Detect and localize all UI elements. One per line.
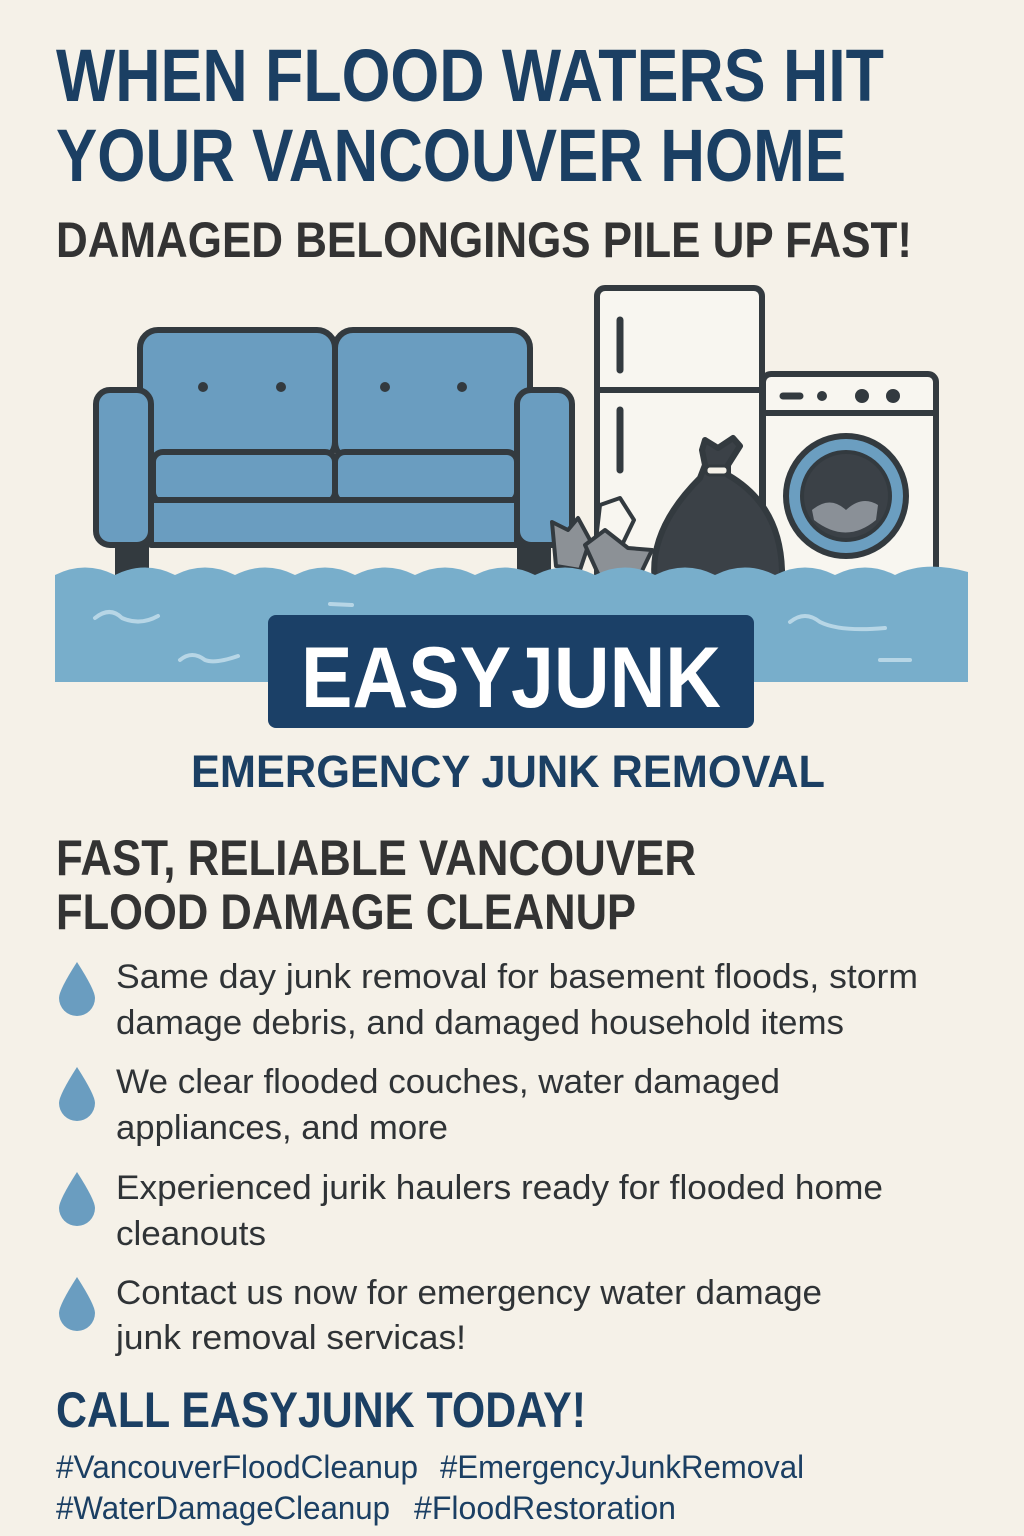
bullet 1	[59, 958, 918, 1042]
bullet 4	[59, 1274, 822, 1357]
hashtags: #FloodRestoration	[414, 1490, 676, 1526]
title: YOUR VANCOUVER HOME	[56, 114, 846, 197]
bullet 2	[59, 1063, 780, 1147]
bullet 3	[59, 1169, 883, 1253]
bullet list	[59, 958, 918, 1357]
section heading	[56, 830, 696, 940]
bullet 2: We clear flooded couches, water damaged	[116, 1063, 780, 1101]
bullet 3: Experienced jurik haulers ready for flooded home	[116, 1169, 883, 1207]
hashtags: #VancouverFloodCleanup	[56, 1449, 418, 1485]
logo badge: EASYJUNK	[301, 630, 721, 726]
hashtags: #WaterDamageCleanup	[56, 1490, 390, 1526]
section heading: FLOOD DAMAGE CLEANUP	[56, 884, 636, 940]
title: WHEN FLOOD WATERS HIT	[56, 34, 884, 117]
illustration: flooded belongings	[96, 288, 936, 588]
bullet 4: Contact us now for emergency water damage	[116, 1274, 822, 1312]
subtitle: DAMAGED BELONGINGS PILE UP FAST!	[56, 212, 912, 268]
icon: fridge	[597, 288, 762, 588]
bullet 1: damage debris, and damaged household items	[116, 1004, 844, 1042]
title	[56, 34, 884, 197]
water	[55, 567, 968, 682]
icon: washing machine	[763, 374, 936, 588]
icon: couch	[96, 330, 572, 585]
icon: trash bag	[654, 438, 782, 582]
hashtags	[56, 1449, 804, 1526]
bullet 3: cleanouts	[116, 1215, 266, 1253]
call to action: CALL EASYJUNK TODAY!	[56, 1382, 586, 1438]
tagline: EMERGENCY JUNK REMOVAL	[191, 746, 825, 797]
hashtags: #EmergencyJunkRemoval	[440, 1449, 804, 1485]
section heading: FAST, RELIABLE VANCOUVER	[56, 830, 696, 886]
bullet 2: appliances, and more	[116, 1109, 448, 1147]
bullet 1: Same day junk removal for basement floods, storm	[116, 958, 918, 996]
bullet 4: junk removal servicas!	[115, 1319, 466, 1357]
icon: debris	[552, 498, 652, 578]
